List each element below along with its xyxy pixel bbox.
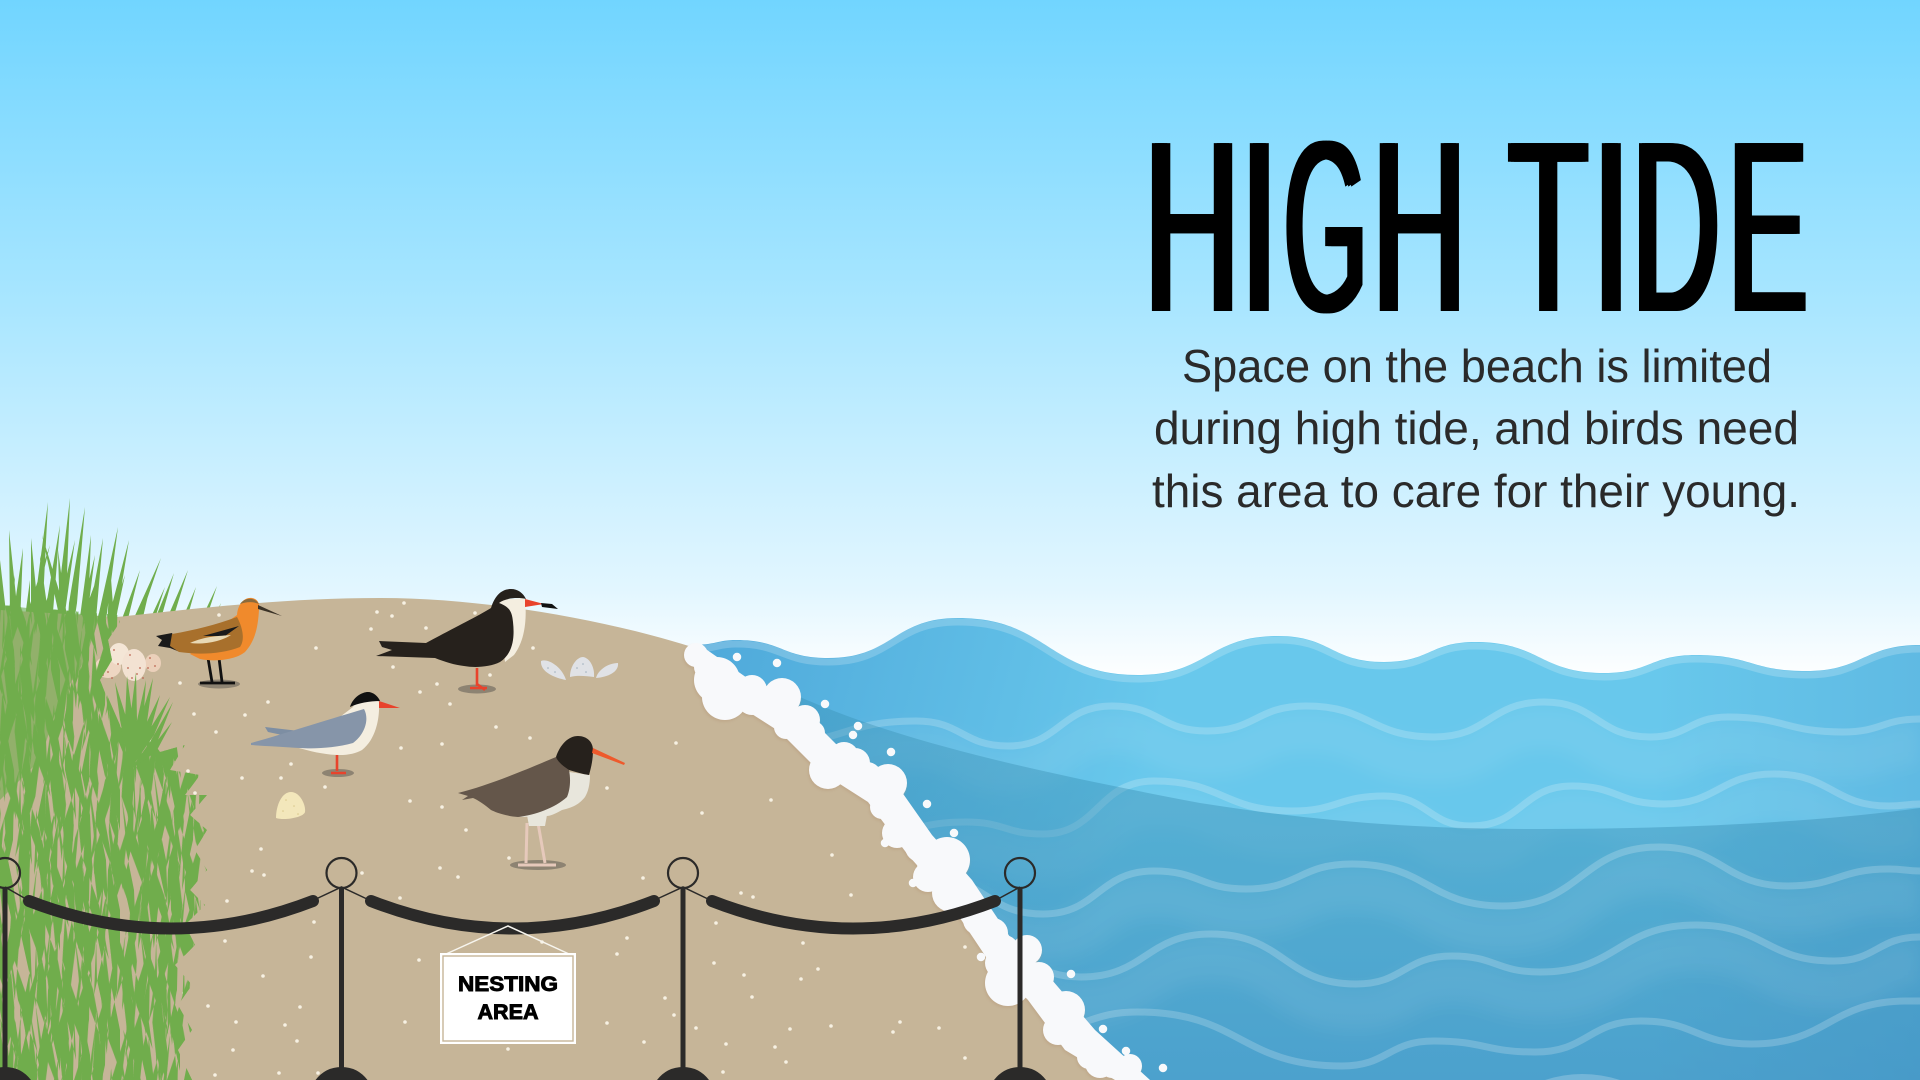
deep water overlay [780,688,1920,1080]
title: H [1141,90,1237,362]
description text: Space on the beach is limited [1182,340,1772,392]
title: I [1237,90,1276,362]
single cream egg [276,792,305,819]
speckled egg clutch [95,643,161,681]
dense grass patch [0,605,100,800]
description text: during high tide, and birds need [1154,402,1799,454]
fence post right [994,858,1046,1080]
sea right shading [690,618,1920,1080]
wave crest 1 [703,618,1920,682]
back grass tuft [0,498,221,700]
title [1141,90,1806,362]
bird: oystercatcher [458,736,625,870]
wave 5 [985,925,1920,1010]
fence post third [657,858,709,1080]
nesting area sign [440,926,576,1044]
sand specks [151,603,965,1075]
foam shoreline [692,645,1150,1080]
nesting area sign: AREA [478,1001,538,1024]
marsh grass body [0,600,210,1080]
fence post left [0,858,31,1080]
nesting area sign: NESTING [458,973,558,996]
broken eggshells [541,657,618,680]
front grass fan tuft [107,672,173,770]
title: E [1725,90,1805,362]
fence post second [316,858,368,1080]
wave 4 [925,847,1920,940]
bird: common tern [251,692,400,777]
description text: this area to care for their young. [1152,465,1800,517]
title: G [1281,90,1364,362]
bird: black skimmer [376,589,558,694]
rope barrier fence [0,858,1046,1080]
rope connectors [5,887,1020,899]
wave 3 [880,774,1920,860]
sea water [690,618,1920,1080]
wave 7 [1545,1074,1620,1080]
bird: orange knot [156,598,282,688]
foam bubbles [737,657,1163,1068]
title: I [1589,90,1628,362]
wave 2 [770,702,1920,772]
description text [1152,340,1800,517]
title: D [1629,90,1717,362]
sand beach [0,598,1125,1080]
title: T [1505,90,1586,362]
wave 6 [1040,1001,1920,1066]
fence ropes [29,901,995,928]
title: H [1369,90,1464,362]
